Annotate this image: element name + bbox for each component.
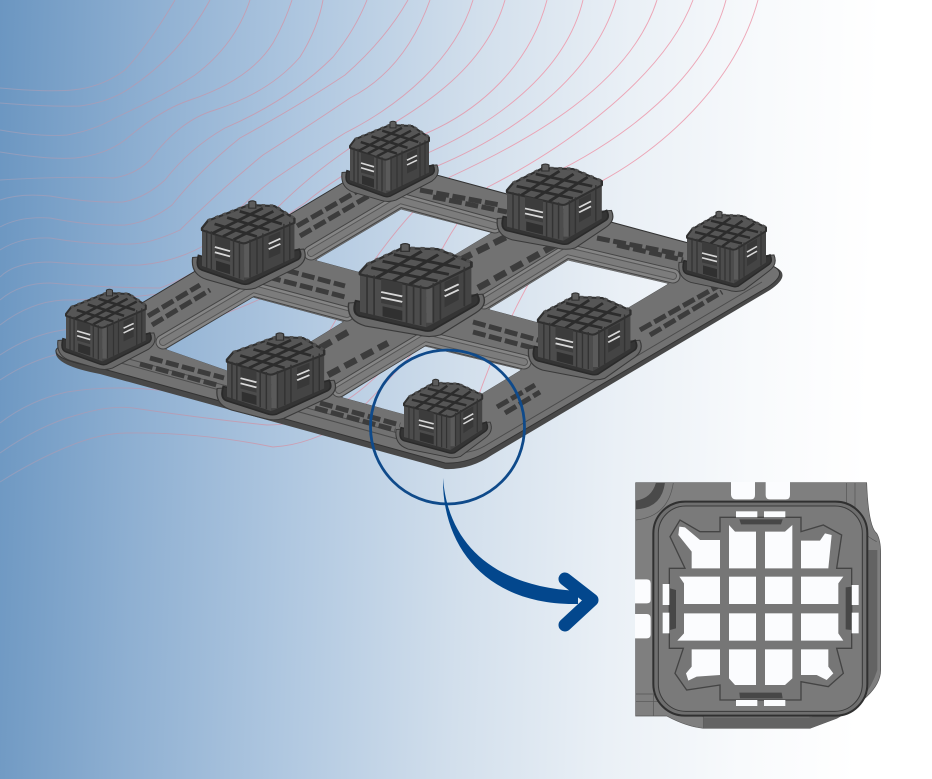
corner arc <box>636 483 665 509</box>
block upper right <box>497 164 613 249</box>
block upper left <box>192 201 305 290</box>
retaining tabs <box>670 519 852 698</box>
deck lower edge <box>56 267 782 470</box>
detail view: underside of block <box>635 482 881 728</box>
deck surface <box>56 160 780 463</box>
support blocks <box>58 121 775 458</box>
curved arrow <box>443 478 592 625</box>
magnifier circle <box>370 350 524 504</box>
block lower left <box>217 333 336 420</box>
block lower right <box>528 293 641 380</box>
block far right <box>679 211 775 291</box>
contour lines <box>0 0 758 482</box>
block far left <box>58 289 155 369</box>
pallet deck <box>56 160 782 469</box>
block centre <box>348 244 484 337</box>
window rims <box>163 200 673 390</box>
block back <box>342 121 438 201</box>
detail base plate <box>636 483 881 728</box>
slots <box>140 188 722 430</box>
grid openings <box>677 525 843 685</box>
window edges <box>167 210 667 422</box>
wide slots <box>320 230 555 375</box>
outer ring <box>653 502 867 716</box>
cross-shaped grid plate <box>669 517 852 700</box>
block front <box>396 379 491 458</box>
deck outer rim lines <box>110 282 762 453</box>
edge slots and notches <box>635 482 859 706</box>
